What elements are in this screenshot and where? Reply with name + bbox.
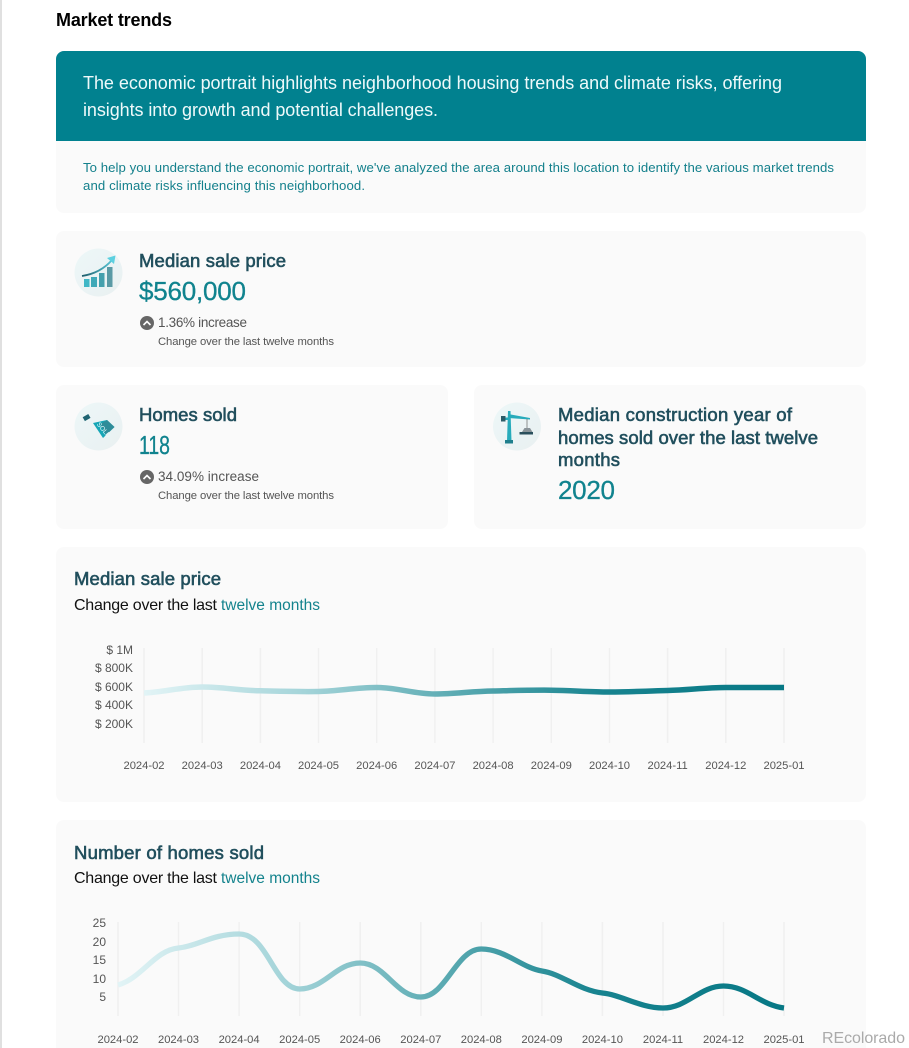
change: Change over the last twelve months bbox=[158, 336, 334, 348]
line chart: homes sold: 2024-04 bbox=[219, 1034, 260, 1046]
line chart: homes sold: 25 bbox=[93, 916, 106, 930]
line chart: median sale price: $ 600K bbox=[95, 680, 133, 694]
heading: Median construction year of bbox=[558, 404, 793, 425]
watermark: REcolorado bbox=[822, 1030, 905, 1047]
icon: rising bar chart bbox=[74, 248, 122, 296]
panel: introduction bbox=[56, 51, 866, 213]
line chart: median sale price: 2024-04 bbox=[240, 760, 281, 772]
panel: median construction year stat bbox=[474, 385, 866, 529]
line chart: homes sold: 20 bbox=[93, 935, 106, 949]
line chart: median sale price: 2024-09 bbox=[531, 760, 572, 772]
panel: homes sold stat bbox=[56, 385, 448, 529]
heading: Number of homes sold bbox=[74, 842, 264, 863]
line chart: homes sold: 2024-02 bbox=[97, 1034, 139, 1046]
line chart: median sale price: 2024-06 bbox=[356, 760, 397, 772]
line chart: median sale price: 2024-10 bbox=[589, 760, 630, 772]
line chart: median sale price: 2024-03 bbox=[182, 760, 223, 772]
line chart: median sale price: $ 1M bbox=[106, 643, 133, 657]
icon: construction crane bbox=[493, 402, 541, 450]
value: 2020 bbox=[558, 475, 615, 505]
line chart: homes sold: 2024-07 bbox=[400, 1034, 441, 1046]
intro text: and climate risks influencing this neighborhood. bbox=[83, 178, 365, 193]
icon: sold tag: SOLD bbox=[95, 421, 112, 440]
panel: median sale price chart bbox=[56, 547, 866, 802]
heading bbox=[558, 404, 818, 470]
teal banner bbox=[56, 51, 866, 141]
line chart: homes sold: 2024-06 bbox=[340, 1034, 381, 1046]
line chart: median sale price: $ 200K bbox=[95, 717, 133, 731]
line chart: median sale price: 2025-01 bbox=[763, 760, 805, 772]
change: Change over the last twelve months bbox=[158, 490, 334, 502]
change: 1.36% increase bbox=[158, 315, 247, 330]
title: Market trends bbox=[56, 10, 172, 30]
line chart: homes sold: 2024-11 bbox=[643, 1034, 683, 1046]
teal banner: The economic portrait highlights neighborhood housing trends and climate risks, offering bbox=[83, 73, 782, 93]
line chart: homes sold: 5 bbox=[99, 990, 106, 1004]
line chart: median sale price: 2024-05 bbox=[298, 760, 339, 772]
heading: Homes sold bbox=[139, 404, 237, 425]
heading: months bbox=[558, 449, 620, 470]
subheading bbox=[74, 597, 320, 614]
subheading: Change over the last bbox=[74, 870, 218, 887]
line chart: median sale price: $ 800K bbox=[95, 661, 133, 675]
line chart: median sale price: 2024-02 bbox=[123, 760, 165, 772]
line chart: homes sold: 2024-12 bbox=[703, 1034, 744, 1046]
line chart: homes sold: 2024-05 bbox=[279, 1034, 320, 1046]
subheading: twelve months bbox=[221, 870, 320, 887]
value: $560,000 bbox=[139, 276, 246, 306]
line chart: homes sold bbox=[93, 916, 805, 1046]
line chart: median sale price: 2024-07 bbox=[414, 760, 455, 772]
subheading: Change over the last bbox=[74, 597, 218, 614]
value: 118 bbox=[139, 430, 170, 460]
line chart: median sale price: 2024-11 bbox=[647, 760, 688, 772]
change bbox=[140, 315, 334, 348]
change: 34.09% increase bbox=[158, 469, 259, 484]
heading: homes sold over the last twelve bbox=[558, 427, 818, 448]
teal banner: insights into growth and potential challenges. bbox=[83, 100, 438, 120]
panel: median sale price stat bbox=[56, 231, 866, 367]
change bbox=[140, 469, 334, 502]
line chart: median sale price: 2024-08 bbox=[473, 760, 514, 772]
heading: Median sale price bbox=[139, 250, 286, 271]
heading: Median sale price bbox=[74, 568, 221, 589]
line chart: homes sold: 10 bbox=[93, 972, 106, 986]
line chart: median sale price: $ 400K bbox=[95, 698, 133, 712]
line chart: homes sold: 2024-08 bbox=[461, 1034, 502, 1046]
intro text bbox=[83, 160, 834, 193]
line chart: homes sold: 2025-01 bbox=[763, 1034, 805, 1046]
line chart: homes sold: 2024-03 bbox=[158, 1034, 199, 1046]
line chart: median sale price bbox=[95, 643, 805, 772]
subheading: twelve months bbox=[221, 597, 320, 614]
icon: sold tag bbox=[74, 402, 122, 450]
line chart: median sale price: 2024-12 bbox=[705, 760, 746, 772]
line chart: homes sold: 2024-10 bbox=[582, 1034, 623, 1046]
line chart: homes sold: 15 bbox=[93, 953, 106, 967]
subheading bbox=[74, 870, 320, 887]
panel: number of homes sold chart bbox=[56, 820, 866, 1048]
line chart: homes sold: 2024-09 bbox=[521, 1034, 562, 1046]
intro text: To help you understand the economic portrait, we've analyzed the area around this location to identify the various market trends bbox=[83, 160, 834, 175]
